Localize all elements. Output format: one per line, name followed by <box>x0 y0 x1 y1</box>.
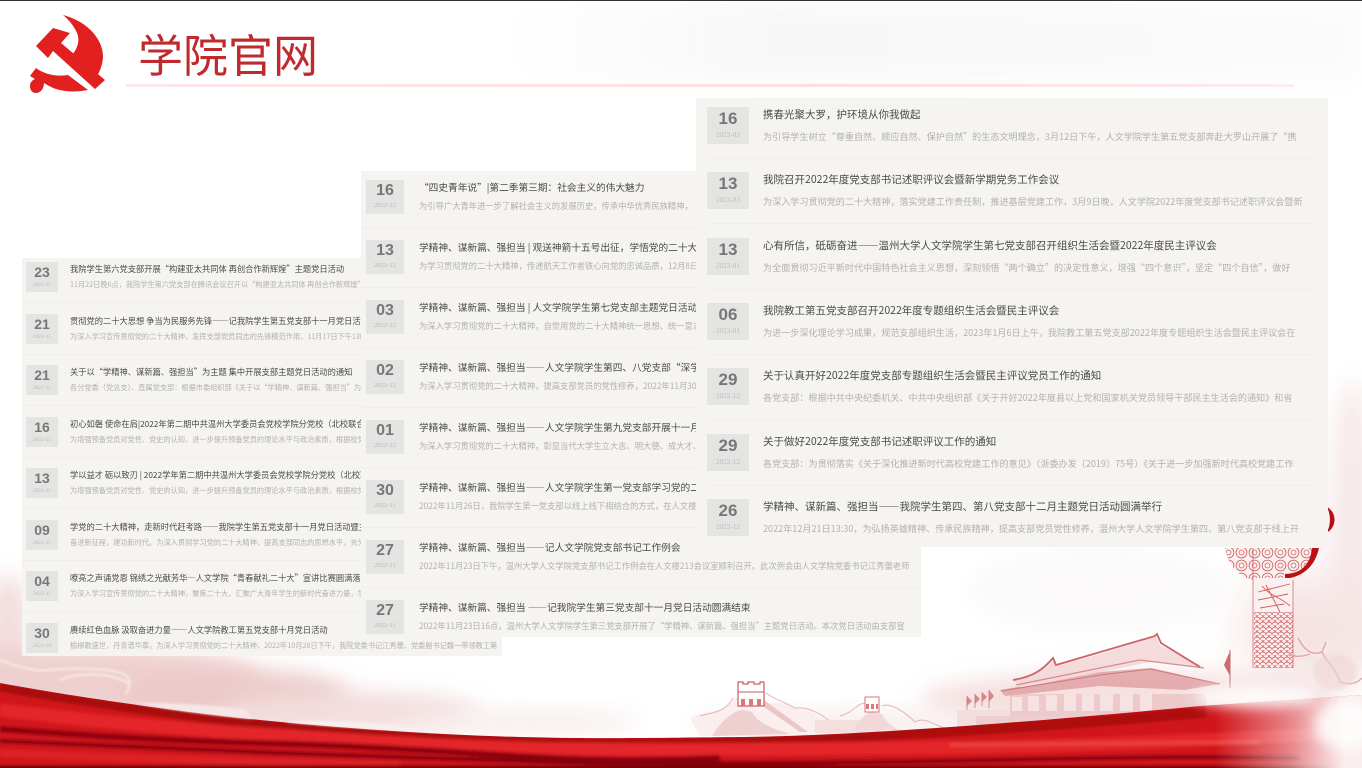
news item 02 <box>366 360 729 394</box>
news item 21: 2022-11 <box>33 334 51 340</box>
news item 16: 2022-12 <box>374 202 396 209</box>
news item 27: 学精神、谋新篇、强担当——记人文学院党支部书记工作例会 <box>419 540 681 554</box>
news item 30: 30 <box>376 482 394 499</box>
news item 21: 贯彻党的二十大思想 争当为民服务先锋——记我院学生第五党支部十一月党日活动 <box>70 314 369 326</box>
news item 13 january: 心有所信，砥砺奋进——温州大学人文学院学生第七党支部召开组织生活会暨2022年度民主评议会 <box>763 238 1217 253</box>
news item 21 notice: 各分党委（党总支）、直属党支部：根据市委组织部《关于以“学精神、谋新篇、强担当”为主题集中开展 <box>70 383 404 393</box>
news item 03: 学精神、谋新篇、强担当 | 人文学院学生第七党支部主题党日活动 <box>419 300 697 314</box>
news item 09: 09 <box>34 522 50 538</box>
news item 13: 13 <box>719 174 737 193</box>
news item 26: 26 <box>719 501 737 520</box>
news item 29 second: 关于做好2022年度党支部书记述职评议工作的通知 <box>763 434 996 448</box>
news item 13: 2022-11 <box>33 488 51 494</box>
clouds at right <box>690 380 1362 739</box>
news item 29 <box>707 368 1292 405</box>
news item 02: 学精神、谋新篇、强担当——人文学院学生第四、八党支部“深学笃行” <box>419 360 729 374</box>
news item 27 second: 2022年11月23日16点，温州大学人文学院学生第三党支部开展了“学精神、谋新篇、强担当”主题党日活动。本次党日活动由支部宣 <box>419 620 905 632</box>
news item 16 <box>26 417 422 447</box>
news item 23: 23 <box>34 264 50 280</box>
news item 06: 为进一步深化理论学习成果，规范支部组织生活，2023年1月6日上午，我院教工第五党支部2022年度专题组织生活会暨民主评议会在 <box>763 325 1295 339</box>
news item 01 <box>366 420 739 454</box>
news item 29 second <box>707 434 1294 471</box>
news item 29: 各党支部：根据中共中央纪委机关、中共中央组织部《关于开好2022年度县以上党和国家机关党员领导干部民主生活会的通知》和省 <box>763 390 1292 404</box>
news item 03: 03 <box>376 302 394 319</box>
news item 03: 2022-12 <box>374 322 396 329</box>
news item 06: 我院教工第五党支部召开2022年度专题组织生活会暨民主评议会 <box>763 303 1059 318</box>
news item 30: 学精神、谋新篇、强担当——人文学院学生第一党支部学习党的二十大精神 <box>419 480 739 494</box>
news item 16: 为增强预备党员对党性、党史的认知，进一步提升预备党员的理论水平与政治素质，根据校党委组织部工作安排 <box>70 434 422 444</box>
news item 13 <box>26 468 422 498</box>
panel: news list middle <box>361 171 921 637</box>
news item 27: 2022年11月23日下午，温州大学人文学院党支部书记工作例会在人文楼213会议室顺利召开。此次例会由人文学院党委书记江秀蕾老师 <box>419 560 909 572</box>
news item 16: 为引导学生树立“尊重自然、顺应自然、保护自然”的生态文明理念，3月12日下午，人文学院学生第五党支部奔赴大罗山开展了“携 <box>763 129 1296 143</box>
news item 13: 学精神、谋新篇、强担当 | 观送神箭十五号出征，学悟党的二十大精神 <box>419 240 717 254</box>
news item 29: 2022-12 <box>716 392 740 400</box>
news item 13: 2023-03 <box>716 196 740 204</box>
cloud wisps over ribbon edge <box>134 703 440 732</box>
news item 29: 29 <box>719 370 737 389</box>
news item 23: 我院学生第六党支部开展“构建亚太共同体 再创合作新辉煌”主题党日活动 <box>70 263 344 275</box>
news item 16 <box>707 107 1296 144</box>
news item 09 <box>26 520 422 550</box>
news item 13: 为学习贯彻党的二十大精神，传递航天工作者铁心向党的忠诚品质，12月8日 <box>419 260 698 272</box>
news item 04 <box>26 571 415 601</box>
news item 13 january: 2023-01 <box>716 262 740 270</box>
news item 02: 02 <box>376 362 394 379</box>
clouds at left <box>0 575 640 734</box>
illustration: Tiananmen gate <box>957 634 1227 734</box>
news item 23 <box>26 262 422 292</box>
news item 27 second: 2022-11 <box>374 622 396 629</box>
news item 01: 2022-12 <box>374 442 396 449</box>
news item 27: 27 <box>376 542 394 559</box>
news item 23: 11月22日晚6点，我院学生第六党支部在腾讯会议召开以“构建亚太共同体 再创合作新辉煌”为主题的党日活动 <box>70 280 422 290</box>
news item 06: 2023-01 <box>716 327 740 335</box>
news item 13: 学以益才 砺以致刃 | 2022学年第二期中共温州大学委员会党校学院分党校（北校联合分党校） <box>70 469 410 481</box>
news item 13: 13 <box>376 242 394 259</box>
news item 02: 2022-12 <box>374 382 396 389</box>
news item 13: 13 <box>34 470 50 486</box>
news item 13: 我院召开2022年度党支部书记述职评议会暨新学期党务工作会议 <box>763 172 1059 187</box>
news item 30: 2022-10 <box>33 642 51 648</box>
news item 16: 2022-11 <box>33 436 51 442</box>
news item 23: 2022-11 <box>33 282 51 288</box>
panel: news list left <box>22 258 502 656</box>
news item 06 <box>707 303 1295 340</box>
news item 01: 学精神、谋新篇、强担当——人文学院学生第九党支部开展十一月主题党日 <box>419 420 739 434</box>
news item 13 january: 为全面贯彻习近平新时代中国特色社会主义思想，深刻领悟“两个确立”的决定性意义，增强“四个意识”，坚定“四个自信”，做好 <box>763 260 1290 274</box>
news item 27 second: 27 <box>376 602 394 619</box>
news item 16: 初心如磐 使命在肩|2022年第二期中共温州大学委员会党校学院分党校（北校联合分党校） <box>70 418 398 430</box>
news item 26 <box>707 499 1299 536</box>
news item 13 <box>707 172 1303 209</box>
news item 30 <box>366 480 739 514</box>
news item 09: 学党的二十大精神，走新时代赶考路——我院学生第五党支部十一月党日活动暨主题教育 <box>70 520 392 532</box>
news item 16: 为引导广大青年进一步了解社会主义的发展历史，传承中华优秀民族精神， <box>419 200 693 212</box>
news item 27 second: 学精神、谋新篇、强担当 ——记我院学生第三党支部十一月党日活动圆满结束 <box>419 600 751 614</box>
news item 30: 榆柳歌盛世，丹青谱华章。为深入学习贯彻党的二十大精神，2022年10月28日下午，我院党委书记江秀蕾、党委副书记魏一带领教工第 <box>70 640 497 650</box>
news item 21 notice <box>26 365 404 395</box>
news item 03 <box>366 300 701 334</box>
news item 16: 2023-03 <box>716 131 740 139</box>
news item 29 second: 29 <box>719 436 737 454</box>
news item 02: 为深入学习贯彻党的二十大精神，提高支部党员的党性修养，2022年11月30日 <box>419 380 705 392</box>
news item 29: 关于认真开好2022年度党支部专题组织生活会暨民主评议党员工作的通知 <box>763 368 1101 383</box>
illustration: Great Wall <box>690 682 945 736</box>
news item 16: 16 <box>719 109 737 128</box>
news item 27: 2022-11 <box>374 562 396 569</box>
news item 16: 16 <box>376 182 394 199</box>
news item 30 <box>26 623 497 653</box>
news item 26: 学精神、谋新篇、强担当——我院学生第四、第八党支部十二月主题党日活动圆满举行 <box>763 499 1162 514</box>
news item 21: 21 <box>34 316 50 332</box>
title underline <box>126 84 1294 87</box>
news item 21: 为深入学习宣传贯彻党的二十大精神，发挥支部党员同志的先锋模范作用，11月17日下午13时，我院学生党支部 <box>70 332 425 342</box>
news item 30: 2022-11 <box>374 502 396 509</box>
news item 29 second: 各党支部：为贯彻落实《关于深化推进新时代高校党建工作的意见》（浙委办发〔2019〕75号）《关于进一步加强新时代高校党建工作 <box>763 456 1293 470</box>
news item 09: 2022-11 <box>33 540 51 546</box>
news item 21 notice: 2022-11 <box>33 385 51 391</box>
ornament: red arc beside panel <box>1328 508 1334 531</box>
news item 21 notice: 21 <box>34 367 50 383</box>
news item 16: 16 <box>34 418 50 434</box>
news item 01: 为深入学习贯彻党的二十大精神，彰显当代大学生立大志、明大德、成大才、担 <box>419 440 709 452</box>
news item 30: 30 <box>34 624 50 640</box>
title: 学院官网 <box>138 20 318 85</box>
news item 01: 01 <box>376 422 394 439</box>
news item 04: 为深入学习宣传贯彻党的二十大精神，聚焦二十大，汇聚广大青年学生的新时代奋进力量，学院举办宣讲比赛 <box>70 589 415 599</box>
news item 21 notice: 关于以“学精神、谋新篇、强担当”为主题 集中开展支部主题党日活动的通知 <box>70 366 352 378</box>
news item 16: “四史青年说”|第二季第三期：社会主义的伟大魅力 <box>419 180 644 194</box>
news item 03: 为深入学习贯彻党的二十大精神，自觉用党的二十大精神统一思想、统一意志 <box>419 320 701 332</box>
news item 30: 2022年11月26日，我院学生第一党支部以线上线下相结合的方式，在人文楼 <box>419 500 696 512</box>
news item 16: 携春光聚大罗，护环境从你我做起 <box>763 107 920 122</box>
news item 27 <box>366 540 909 574</box>
news item 09: 奋进新征程，建功新时代。为深入贯彻学习党的二十大精神，提高支部同志的思想水平，充分发挥党员先锋作用 <box>70 538 422 548</box>
news item 21 <box>26 314 425 344</box>
news item 30: 赓续红色血脉 汲取奋进力量——人文学院教工第五党支部十月党日活动 <box>70 624 328 636</box>
news item 06: 06 <box>719 305 737 324</box>
icon: hammer and sickle party emblem <box>30 15 105 93</box>
news item 13: 2022-12 <box>374 262 396 269</box>
news item 13: 为增强预备党员对党性、党史的认知，进一步提升预备党员的理论水平与政治素质，根据校党委组织部工作安排 <box>70 486 422 496</box>
panel: news list right <box>696 98 1328 547</box>
news item 27 second <box>366 600 905 634</box>
illustration: flag and branches <box>1224 638 1362 690</box>
news item 13: 为深入学习贯彻党的二十大精神，落实党建工作责任制，推进基层党建工作，3月9日晚，人文学院2022年度党支部书记述职评议会暨新 <box>763 194 1303 208</box>
red ribbon <box>0 678 1362 768</box>
news item 26: 2022-12 <box>716 523 740 531</box>
news item 13 january <box>707 238 1290 275</box>
news item 16 <box>366 180 693 214</box>
news item 13 january: 13 <box>719 240 737 259</box>
news item 04: 2022-11 <box>33 591 51 597</box>
news item 26: 2022年12月21日13:30，为弘扬英雄精神、传承民族精神，提高支部党员党性修养，温州大学人文学院学生第四、第八党支部于线上开 <box>763 521 1299 535</box>
news item 04: 嘹亮之声诵党恩 锦绣之光献芳华—人文学院“青春献礼二十大”宣讲比赛圆满落幕 <box>70 572 369 584</box>
news item 04: 04 <box>34 573 50 589</box>
illustration: huabiao column <box>1225 548 1319 668</box>
news item 13 <box>366 240 717 274</box>
news item 29 second: 2022-12 <box>716 458 740 466</box>
